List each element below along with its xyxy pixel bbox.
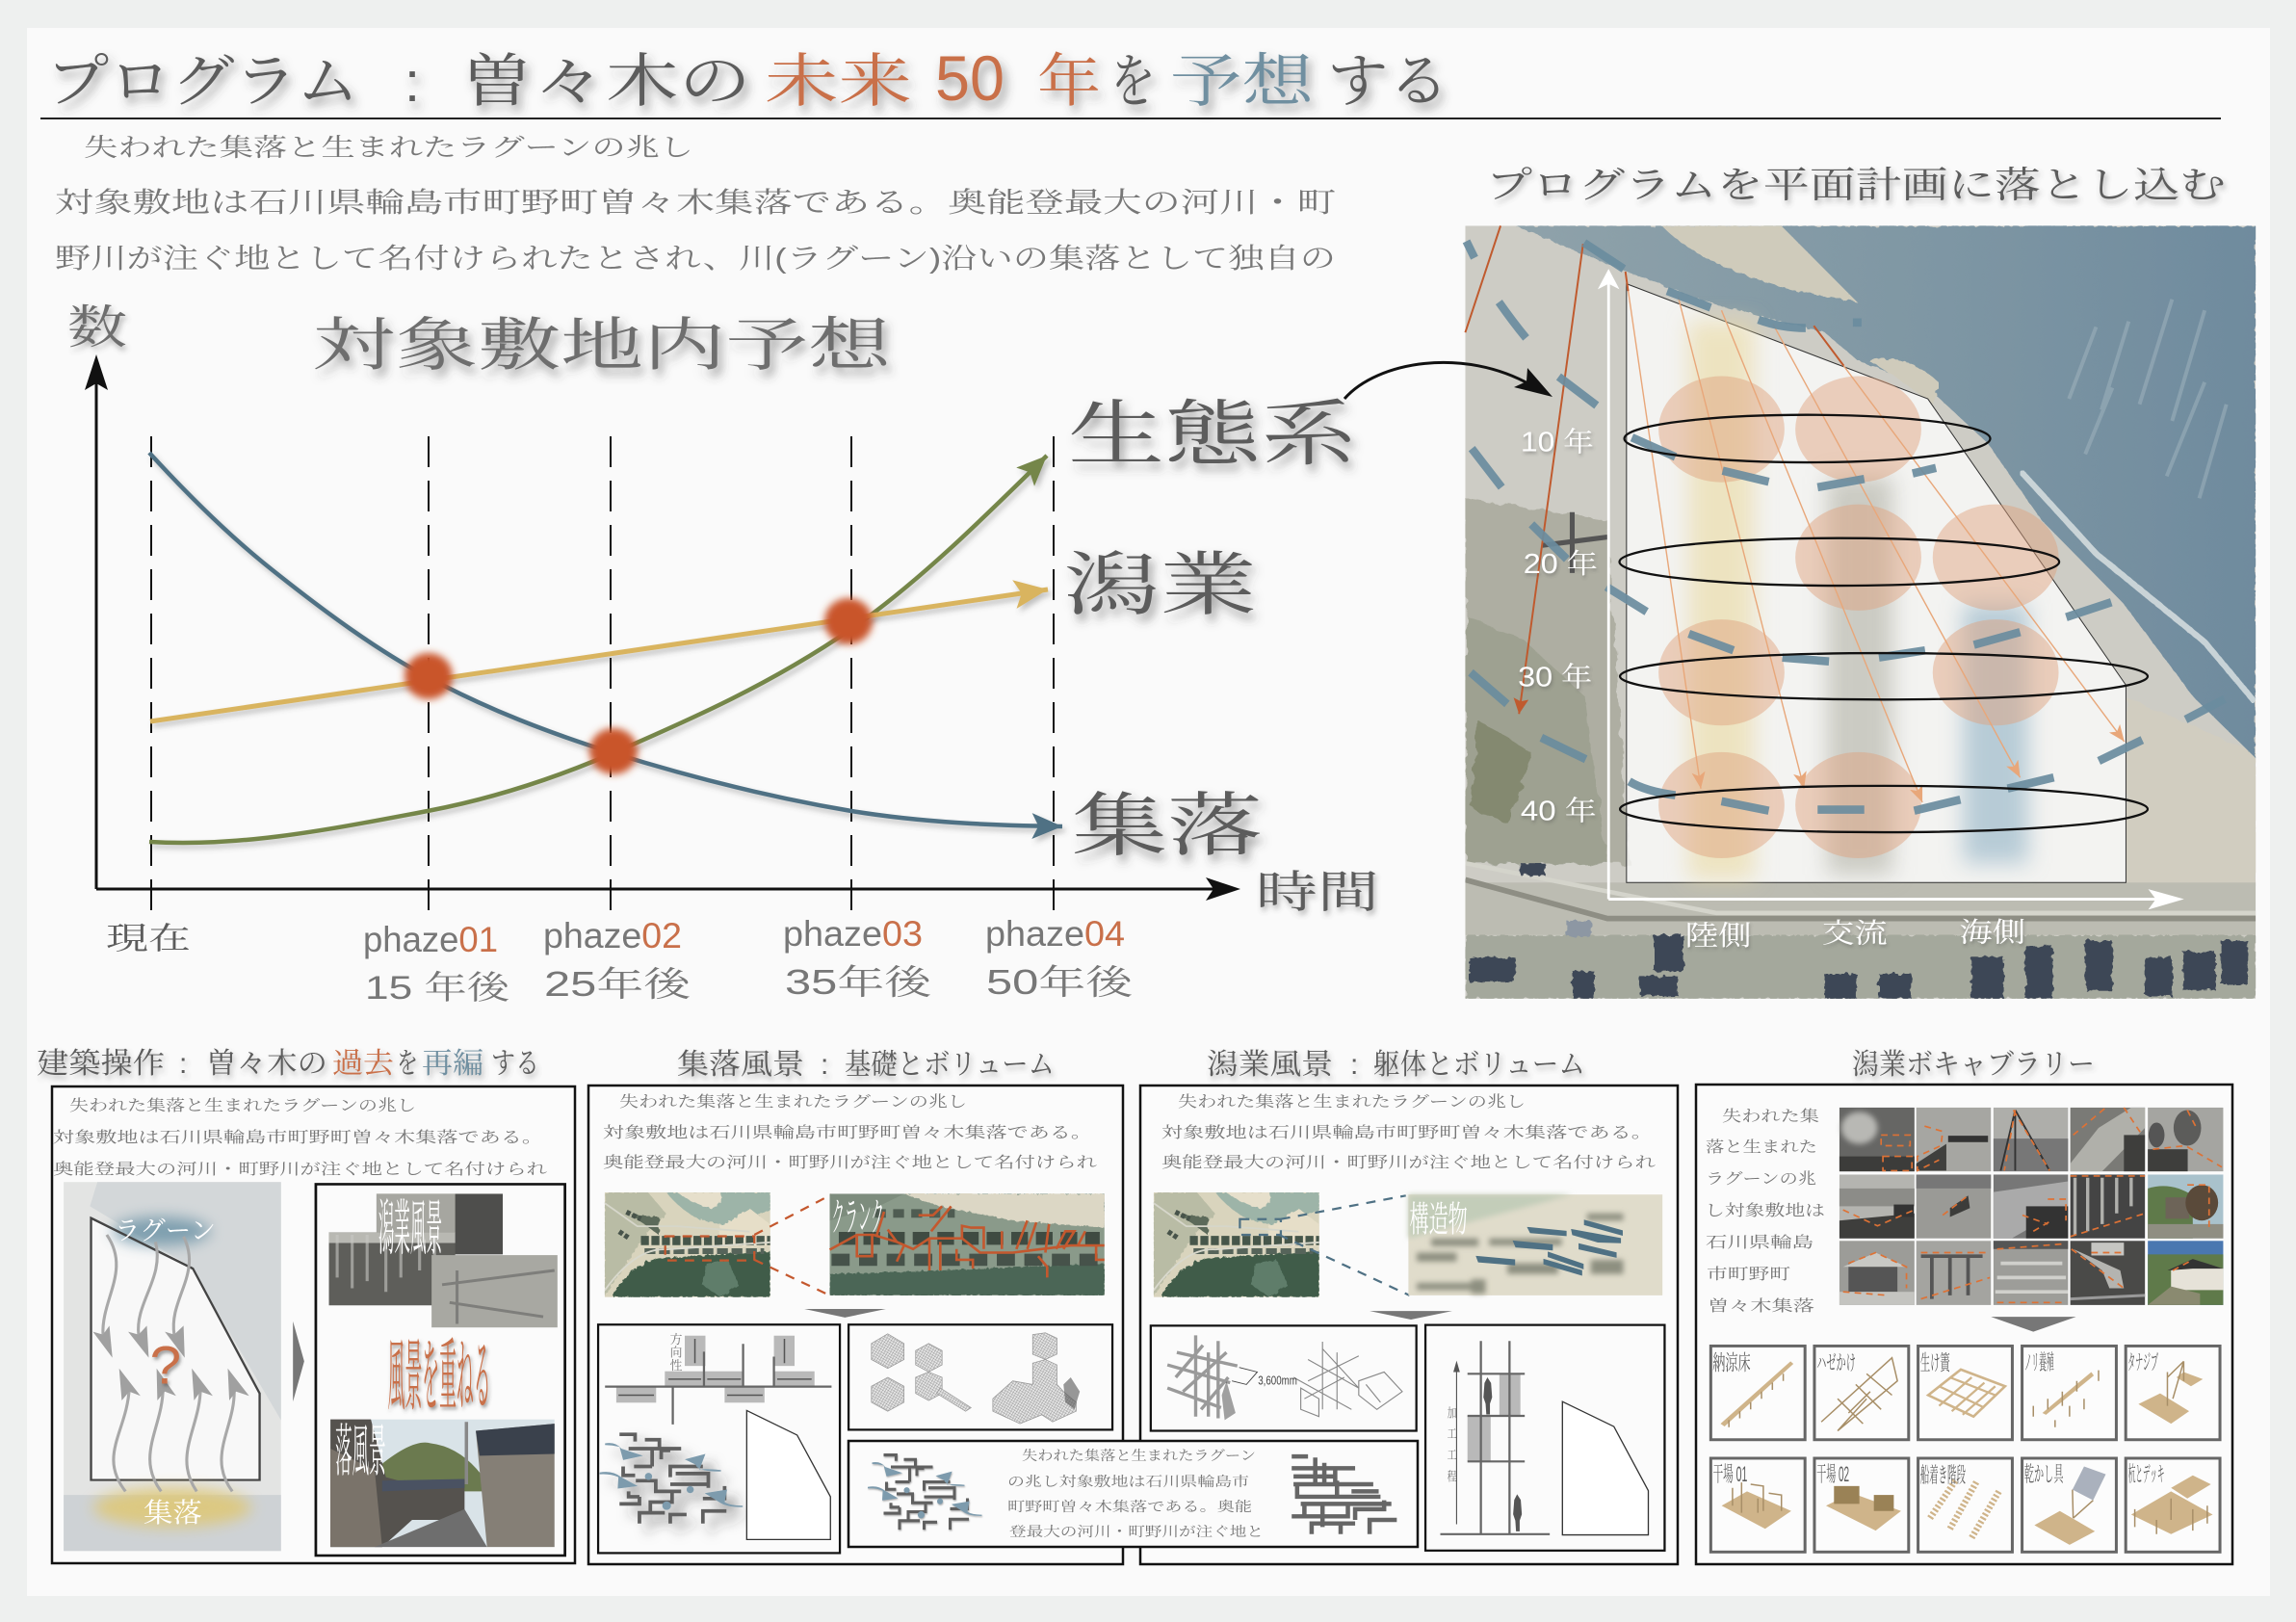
- panel text: [1161, 1092, 1656, 1171]
- wide box text: [1007, 1448, 1264, 1539]
- heading: site plan: プログラムを平面計画に落とし込む: [1486, 166, 2226, 206]
- phase labels: [106, 914, 1134, 1007]
- wide box text: の兆し対象敷地は石川県輪島市: [1007, 1474, 1249, 1489]
- title: [46, 42, 1449, 114]
- intro text: 野川が注ぐ地として名付けられたとされ、川(ラグーン)沿いの集落として独自の: [55, 243, 1336, 275]
- heading: architecture operation: 過去: [332, 1048, 394, 1080]
- question mark: ?: [150, 1336, 181, 1396]
- panel text: 石川県輪島: [1706, 1234, 1813, 1251]
- panel text: 市町野町: [1707, 1266, 1790, 1283]
- card labels: 納涼床: [1712, 1351, 1751, 1375]
- intro text: 失われた集落と生まれたラグーンの兆し: [84, 133, 693, 162]
- label: lagoon industry: 潟業: [1063, 547, 1257, 624]
- diagram: site with flows: 落風景: [335, 1419, 386, 1483]
- wide box text: 失われた集落と生まれたラグーン: [1022, 1448, 1256, 1463]
- photo highlights: [1843, 1108, 2222, 1302]
- panel text: [53, 1096, 547, 1178]
- year labels: 海側: [1959, 917, 2025, 949]
- title: 予想: [1170, 49, 1315, 114]
- panel text: 失われた集落と生まれたラグーンの兆し: [69, 1096, 416, 1114]
- panel: lagoon industry landscape: 工: [1448, 1426, 1456, 1441]
- sub-box: landscape photos: [316, 1184, 565, 1556]
- phase labels: 50年後: [986, 962, 1134, 1002]
- program circles: [1658, 377, 2059, 858]
- triangle arrow: [804, 1309, 886, 1318]
- heading: settlement landscape: 基礎とボリューム: [845, 1049, 1055, 1081]
- panel: settlement landscape: [588, 1086, 1123, 1564]
- phase labels: 現在: [106, 921, 191, 955]
- alley lines: [830, 1206, 1105, 1277]
- card labels: 生け簀: [1920, 1351, 1950, 1375]
- panel: lagoon industry landscape: [1140, 1086, 1678, 1564]
- card labels: [1712, 1350, 2164, 1487]
- panel: settlement landscape: クランク: [831, 1195, 884, 1239]
- chart title: 対象敷地内予想: [313, 313, 892, 378]
- wavy arrows: [103, 1235, 234, 1491]
- settlement blur: [93, 1488, 251, 1527]
- year labels: 陸側: [1685, 921, 1751, 952]
- dashed zoom lines: [1239, 1195, 1410, 1295]
- x-axis label: 時間: [1256, 867, 1379, 917]
- curved arrow to map: [1344, 362, 1552, 399]
- line chart: [85, 354, 1240, 915]
- year labels: 20 年: [1524, 549, 1598, 580]
- aerial sea: [1515, 225, 2256, 758]
- heading: lagoon industry landscape: 躯体とボリューム: [1373, 1049, 1585, 1081]
- card labels: 乾かし具: [2024, 1462, 2064, 1486]
- lagoon blur: [113, 1217, 210, 1245]
- phase labels: phaze02: [543, 916, 682, 955]
- panel text: 落と生まれた: [1706, 1138, 1817, 1156]
- program bands: [1689, 322, 2028, 879]
- panel: lagoon industry landscape: 工: [1448, 1448, 1456, 1462]
- year labels: 交流: [1822, 918, 1887, 949]
- panel: vocabulary: タナジブ: [2127, 1350, 2158, 1374]
- curve: settlement: [149, 453, 1062, 826]
- panel: architecture operation: 集落: [144, 1498, 202, 1528]
- phase labels: phaze04: [985, 914, 1125, 954]
- panel text: 失われた集落と生まれたラグーンの兆し: [1178, 1092, 1526, 1111]
- phase labels: 35年後: [785, 962, 932, 1002]
- heading: architecture operation: 建築操作: [37, 1048, 165, 1080]
- person figures: [1483, 1377, 1522, 1531]
- card labels: ノリ養殖: [2024, 1350, 2054, 1374]
- site labels: ラグーン: [115, 1216, 216, 1245]
- aerial thumbnail: [605, 1192, 770, 1297]
- year labels: 10 年: [1521, 427, 1594, 458]
- aerial land: [1465, 498, 2256, 897]
- title rule: [40, 118, 2221, 119]
- dashed zoom lines: [665, 1194, 831, 1295]
- heading: architecture operation: を: [397, 1048, 418, 1080]
- panel: settlement landscape: 向: [670, 1346, 682, 1360]
- curve: ecosystem: [149, 456, 1047, 843]
- sub-box: section diagram: [1425, 1325, 1664, 1551]
- flow arrows: [1626, 272, 2125, 802]
- title: する: [1327, 49, 1449, 114]
- label: settlement: 集落: [1072, 788, 1263, 865]
- y-axis label: 数: [67, 302, 127, 353]
- aerial zoom: [1408, 1194, 1662, 1295]
- panel: lagoon industry landscape: 程: [1448, 1469, 1457, 1483]
- intro text: [55, 133, 1336, 275]
- card labels: 干場 02: [1816, 1462, 1849, 1486]
- panel text: 対象敷地は石川県輪島市町野町曽々木集落である。: [603, 1123, 1092, 1141]
- heading: vocabulary: 潟業ボキャブラリー: [1852, 1049, 2095, 1081]
- year ellipses: [1620, 415, 2148, 832]
- title: :: [404, 51, 420, 114]
- wide box text: 町野町曽々木集落である。奥能: [1007, 1499, 1252, 1514]
- vocabulary cards: [1710, 1346, 2220, 1552]
- panel text: 対象敷地は石川県輪島市町野町曽々木集落である。: [53, 1128, 543, 1146]
- site outline: [1562, 1401, 1648, 1535]
- heading: architecture operation: 曽々木の: [206, 1048, 327, 1080]
- intro text: 対象敷地は石川県輪島市町野町曽々木集落である。奥能登最大の河川・町: [55, 187, 1336, 219]
- heading: architecture operation: :: [179, 1048, 187, 1080]
- aerial thumbnail: [1154, 1192, 1319, 1297]
- diagram: site with flows: 潟業風景: [378, 1194, 442, 1262]
- panel: vocabulary: 杭とデッキ: [2128, 1462, 2164, 1486]
- heading: settlement landscape: 集落風景: [677, 1049, 804, 1081]
- triangle arrow: [293, 1321, 304, 1401]
- labyrinth plan small: [868, 1455, 982, 1530]
- triangle arrow: [1370, 1311, 1452, 1320]
- panel text: し対象敷地は: [1705, 1201, 1825, 1219]
- heading: architecture operation: する: [491, 1048, 539, 1080]
- panel: vocabulary: [1696, 1085, 2232, 1564]
- card labels: 干場 01: [1713, 1462, 1747, 1486]
- panel text: 対象敷地は石川県輪島市町野町曽々木集落である。: [1161, 1123, 1653, 1141]
- panel text: 奥能登最大の河川・町野川が注ぐ地として名付けられ: [1161, 1153, 1656, 1171]
- white axes: [1598, 269, 2184, 909]
- photo grid: [1839, 1108, 2223, 1305]
- heading: settlement landscape: [677, 1049, 1055, 1081]
- road and houses: [1465, 882, 2256, 935]
- heading: settlement landscape: :: [821, 1049, 828, 1081]
- year labels: 30 年: [1518, 662, 1592, 693]
- heading: lagoon industry landscape: :: [1350, 1049, 1358, 1081]
- panel: shared wide text box: [848, 1441, 1418, 1547]
- year labels: 40 年: [1521, 796, 1597, 826]
- panel text: [603, 1092, 1097, 1171]
- panel: lagoon industry landscape: 加: [1448, 1406, 1456, 1420]
- card labels: ハゼかけ: [1816, 1351, 1856, 1375]
- site outline: [746, 1410, 830, 1539]
- panel: settlement landscape: 性: [670, 1357, 683, 1373]
- heading: lagoon industry landscape: [1207, 1049, 1585, 1081]
- lagoon dashed line: [1467, 241, 2225, 811]
- labyrinth plan: [600, 1434, 743, 1524]
- year labels: [1518, 427, 2025, 952]
- aerial zoom: [830, 1193, 1105, 1295]
- wood models: [1721, 1361, 2213, 1545]
- red arrows: [1465, 225, 1843, 714]
- intersection dots: [404, 598, 873, 774]
- title: プログラム: [46, 49, 359, 114]
- panel: lagoon industry landscape: 3,600mm: [1258, 1373, 1297, 1387]
- panel text: ラグーンの兆: [1706, 1170, 1816, 1188]
- map: site plan: [1465, 225, 2256, 999]
- phase labels: phaze01: [363, 920, 498, 959]
- wide box text: 登最大の河川・町野川が注ぐ地と: [1009, 1524, 1264, 1539]
- title: 年: [1037, 49, 1101, 114]
- title: 曽々木の: [460, 49, 751, 114]
- title: 50: [935, 42, 1004, 114]
- panel: architecture operation: [52, 1086, 575, 1563]
- panel text: 失われた集: [1722, 1108, 1819, 1125]
- label: ecosystem: 生態系: [1068, 394, 1357, 474]
- sub-box: direction diagram: [598, 1324, 840, 1553]
- line: lagoon industry: [150, 589, 1048, 721]
- heading: architecture operation: [37, 1048, 539, 1080]
- panel text: [1705, 1108, 1825, 1315]
- panel text: 曽々木集落: [1708, 1296, 1814, 1315]
- heading: lagoon industry landscape: 潟業風景: [1207, 1049, 1333, 1081]
- title: を: [1110, 49, 1156, 114]
- panel text: 奥能登最大の河川・町野川が注ぐ地として名付けられ: [53, 1160, 547, 1178]
- triangle arrow: [1991, 1317, 2076, 1332]
- poster: 風景を重ねる: [388, 1332, 491, 1420]
- panel text: 失われた集落と生まれたラグーンの兆し: [619, 1092, 967, 1111]
- sub-box: structure diagram: [1151, 1325, 1417, 1431]
- title: 未来: [765, 49, 912, 114]
- panel: lagoon industry landscape: 構造物: [1410, 1199, 1468, 1239]
- phase labels: 15 年後: [365, 970, 510, 1007]
- card labels: 船着き階段: [1920, 1463, 1966, 1487]
- heading: architecture operation: 再編: [422, 1048, 483, 1080]
- panel: settlement landscape: 方: [670, 1331, 682, 1347]
- labyrinth plan right: [1292, 1456, 1396, 1534]
- diagram: site with flows: [64, 1182, 565, 1556]
- axes: [85, 354, 1240, 901]
- sub-box: volume diagrams: [848, 1324, 1112, 1429]
- panel text: 奥能登最大の河川・町野川が注ぐ地として名付けられ: [603, 1153, 1097, 1171]
- structure bars: [1477, 1221, 1622, 1274]
- phase labels: 25年後: [544, 964, 691, 1004]
- phase labels: phaze03: [783, 914, 923, 954]
- site polygon: [1627, 284, 2126, 882]
